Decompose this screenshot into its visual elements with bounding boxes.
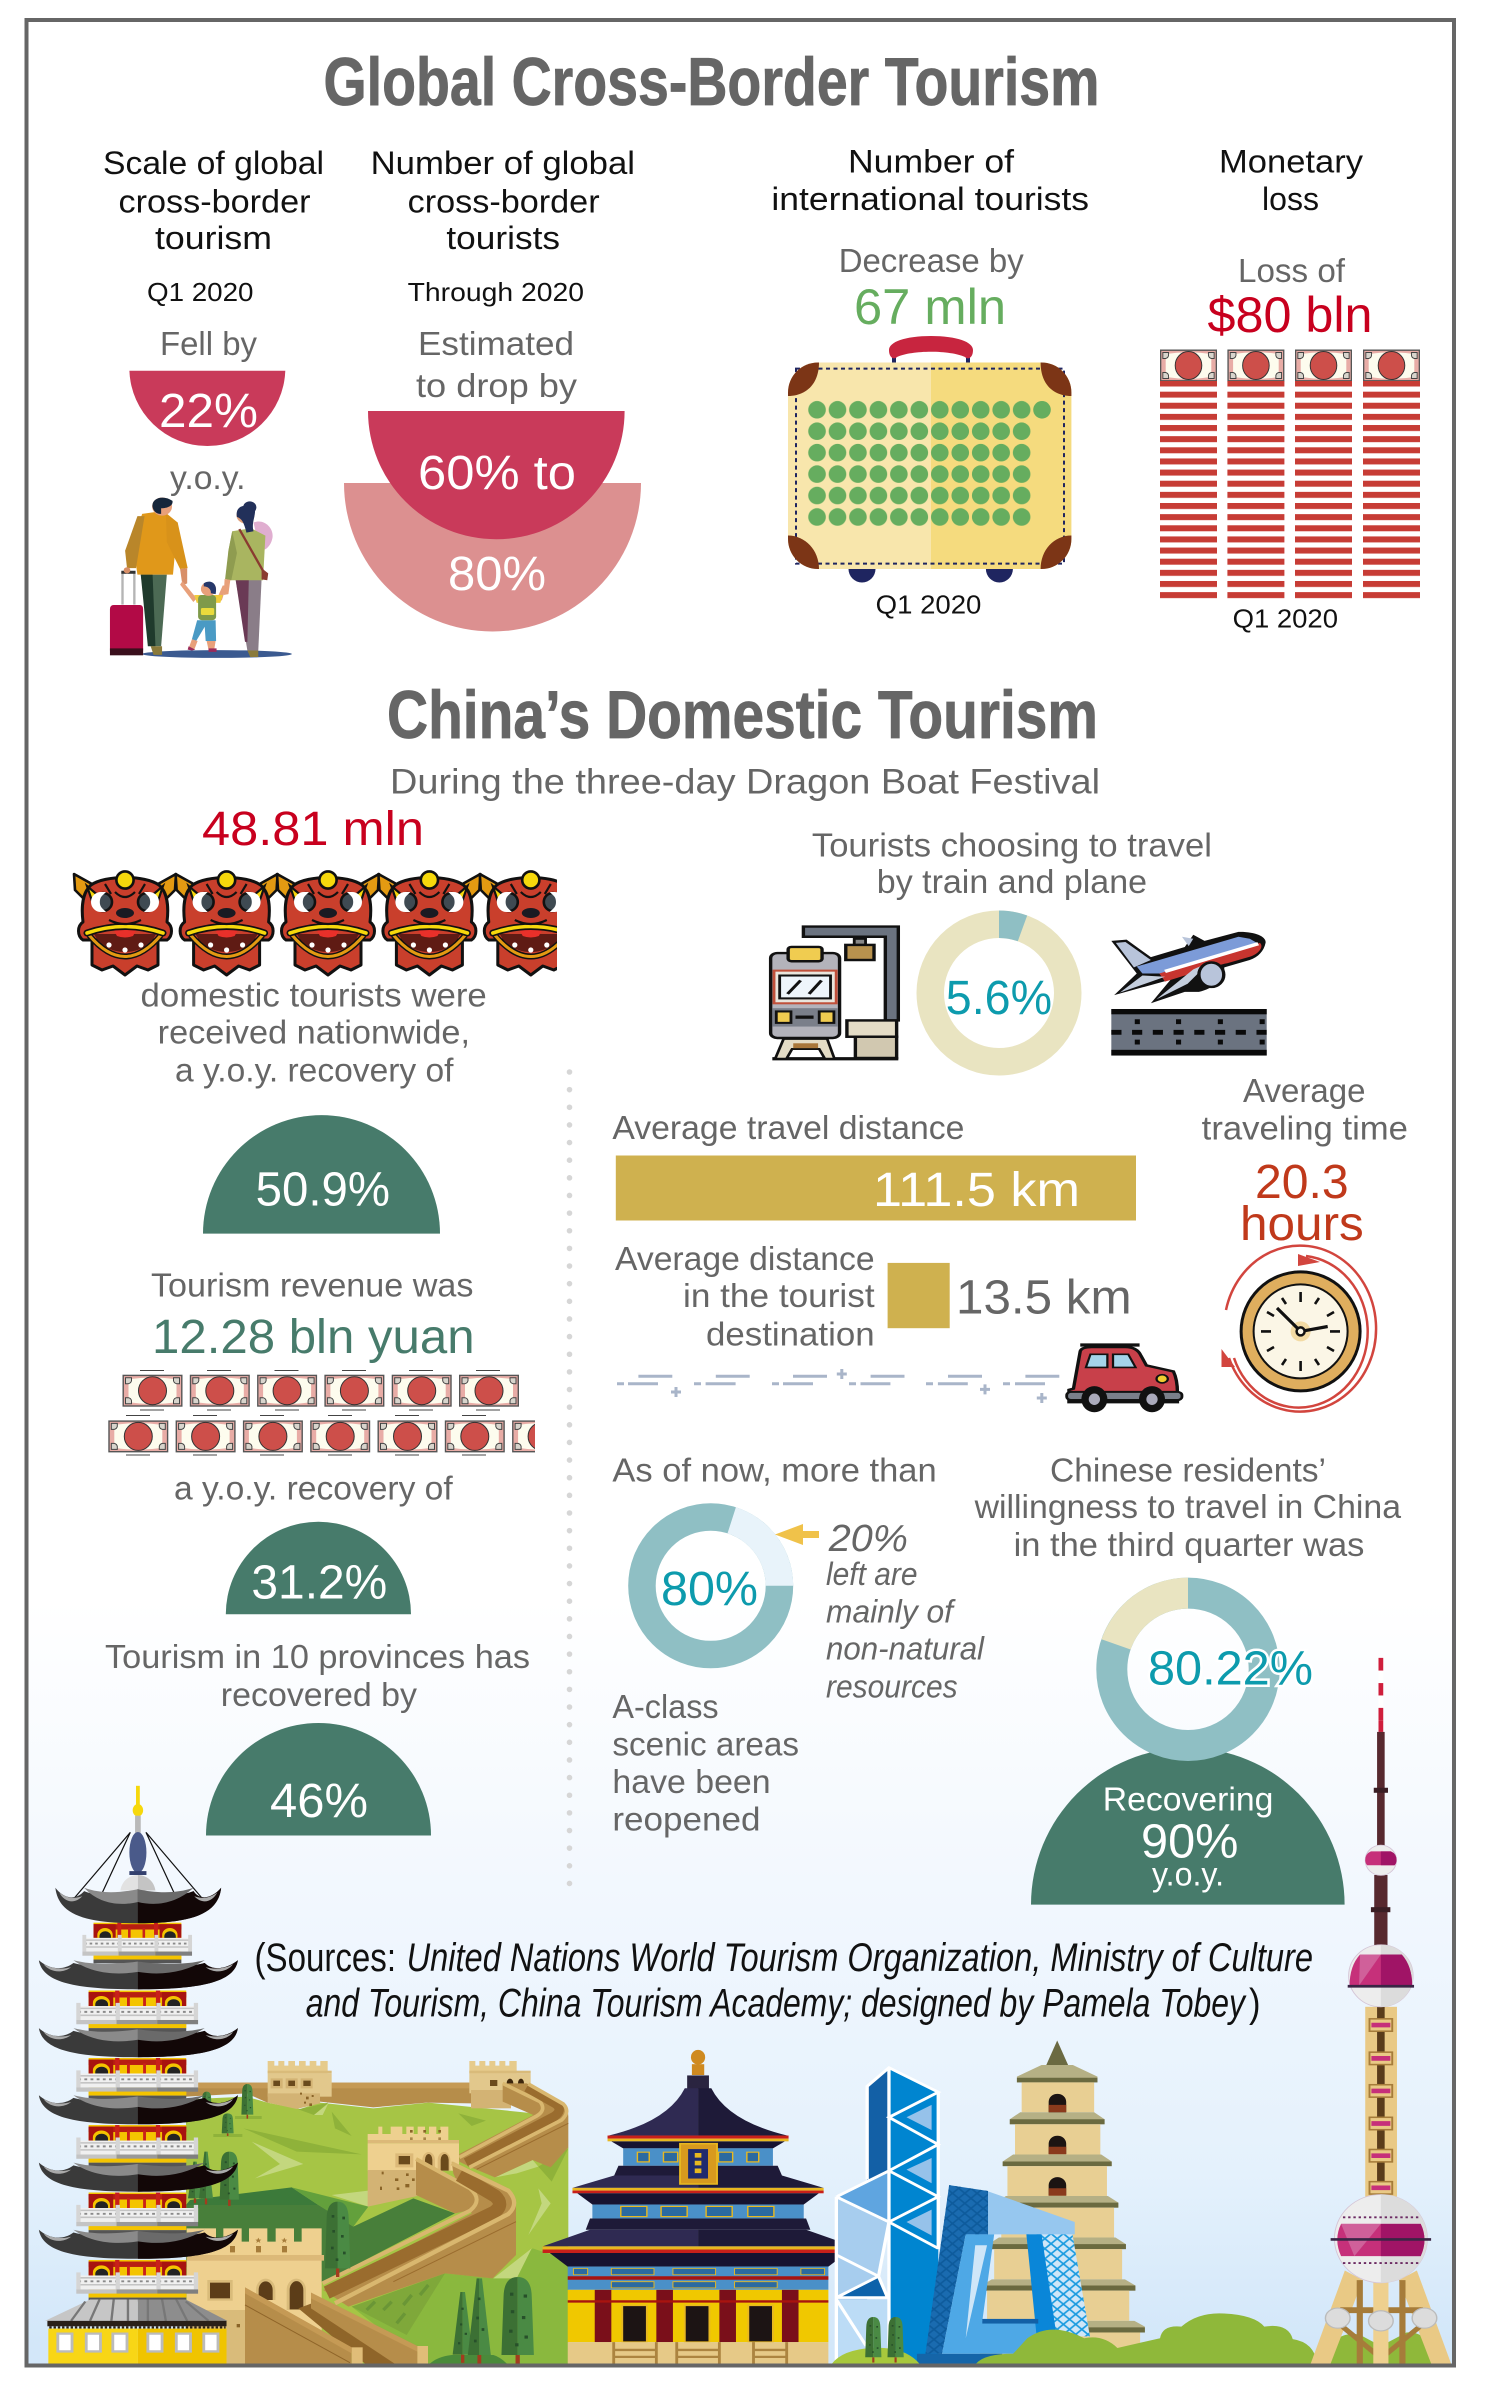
value: 67 mln: 67 mln xyxy=(854,279,1006,335)
callout: 20% left are mainly of non-natural resources: left are xyxy=(826,1556,918,1592)
label: Chinese residents' willingness xyxy=(974,1451,1402,1563)
label: average traveling time: Average xyxy=(1243,1072,1366,1109)
icon: red car xyxy=(1067,1345,1182,1412)
label: tourism in 10 provinces xyxy=(105,1638,530,1713)
panel: tourists by train and plane xyxy=(771,826,1267,1062)
value: 20.3 hours: 20.3 xyxy=(1255,1156,1349,1209)
label: a y.o.y. recovery of: a y.o.y. recovery of xyxy=(174,1470,454,1506)
illustration: Temple of Heaven xyxy=(543,2050,853,2363)
panel: scale of global cross-border tourism xyxy=(103,145,324,658)
label: tourists choosing to travel: by train and plane xyxy=(877,863,1147,900)
label: average distance in the tourist destination xyxy=(615,1240,875,1353)
callout: 20% left are mainly of non-natural resources: mainly of xyxy=(826,1593,956,1629)
heading: number of global tourists: tourists xyxy=(446,220,560,256)
label: y.o.y.: y.o.y. xyxy=(170,459,246,496)
half circle: 22%: 22% xyxy=(159,385,258,438)
half circles: 60% to 80%: 60% to xyxy=(418,447,576,500)
panel: monetary loss xyxy=(1160,144,1420,634)
panel: average traveling time xyxy=(1202,1072,1408,1412)
heading: number of global tourists: cross-border xyxy=(408,184,600,220)
text: domestic tourists received xyxy=(140,976,487,1088)
source note: and Tourism, China Tourism Academy; designed by Pamela Tobey xyxy=(306,1982,1247,2026)
panel: tourism revenue xyxy=(109,1267,571,1614)
label: average distance in the tourist destination: destination xyxy=(706,1316,875,1353)
heading: scale of global tourism: cross-border xyxy=(118,184,311,220)
heading: scale of global tourism: tourism xyxy=(155,220,272,256)
label: average travel distance: Average travel distance xyxy=(612,1109,964,1146)
text: domestic tourists received: received nationwide, xyxy=(158,1014,470,1050)
source note xyxy=(254,1936,1313,2026)
road markings xyxy=(617,1369,1059,1403)
icon rows: banknotes xyxy=(109,1370,571,1455)
panel: willingness to travel xyxy=(974,1451,1402,1905)
icon row: lion dance heads xyxy=(74,871,582,975)
label: estimated to drop by xyxy=(416,325,578,404)
icon: travelling family xyxy=(110,497,292,658)
label: loss of: Loss of xyxy=(1238,252,1346,289)
callout: 20% left are mainly of non-natural resources: 20% xyxy=(828,1518,908,1560)
label: tourists choosing to travel: Tourists choosing to travel xyxy=(812,826,1212,863)
bar: 13.5 km xyxy=(888,1263,1132,1328)
heading: number of international tourists xyxy=(771,144,1089,217)
panel: domestic tourists xyxy=(74,803,582,1234)
label: tourism revenue was: Tourism revenue was xyxy=(151,1267,473,1304)
heading: monetary loss: loss xyxy=(1262,181,1319,217)
label: tourism in 10 provinces: recovered by xyxy=(221,1676,418,1713)
illustration: landmark skyline xyxy=(39,1658,1451,2365)
panel: number of global cross-border tourists xyxy=(344,145,641,632)
subheading: dragon boat festival: During the three-day Dragon Boat Festival xyxy=(390,763,1100,802)
icon: suitcase with dots xyxy=(788,336,1071,582)
bar: 111.5 km: 111.5 km xyxy=(873,1164,1080,1217)
heading: scale of global tourism xyxy=(103,145,324,256)
illustration: pagoda xyxy=(39,1786,238,2363)
value: 20.3 hours: hours xyxy=(1240,1198,1364,1251)
heading: monetary loss: Monetary xyxy=(1219,144,1363,180)
donut chart: 80% xyxy=(642,1507,793,1655)
text: domestic tourists received: domestic tourists were xyxy=(140,976,487,1014)
bar: 13.5 km: 13.5 km xyxy=(956,1272,1132,1324)
half circle: recovering 90% y.o.y.: 90% xyxy=(1141,1816,1238,1869)
half circle: 22% xyxy=(129,371,285,446)
heading: number of global tourists xyxy=(371,145,635,256)
label: tourists choosing to travel xyxy=(812,826,1212,900)
label: A-class scenic areas have been reopened: A-class xyxy=(612,1688,719,1725)
illustration: Bank of China Tower xyxy=(836,2068,938,2363)
period label: through 2020: Through 2020 xyxy=(408,277,584,307)
panel: average travel distance xyxy=(612,1109,1182,1412)
half circle: recovering 90% y.o.y.: Recovering xyxy=(1103,1780,1273,1817)
source note: ) xyxy=(1249,1982,1260,2026)
heading: China's Domestic Tourism: China’s Domestic Tourism xyxy=(387,677,1098,753)
illustration: Great Wall xyxy=(186,2061,568,2365)
panel: number of international tourists xyxy=(771,144,1089,620)
label: A-class scenic areas have been reopened xyxy=(612,1688,799,1838)
illustration: Giant Wild Goose Pagoda xyxy=(975,2041,1145,2363)
icon: train at station xyxy=(771,927,898,1059)
value: 12.28 bln yuan: 12.28 bln yuan xyxy=(152,1311,475,1364)
half circle: recovering 90% y.o.y. xyxy=(1031,1748,1345,1905)
label: estimated to drop by: Estimated xyxy=(418,325,574,362)
value: $80 bln: $80 bln xyxy=(1208,287,1372,343)
title: Global Cross-Border Tourism: Global Cross-Border Tourism xyxy=(324,44,1100,120)
heading: scale of global tourism: Scale of global xyxy=(103,145,324,181)
half circle: 46%: 46% xyxy=(270,1775,368,1828)
heading: number of international tourists: international tourists xyxy=(771,181,1089,217)
panel: A-class scenic areas xyxy=(612,1451,985,1838)
donut chart: 80%: 80% xyxy=(661,1563,758,1616)
panel: tourism in 10 provinces xyxy=(105,1638,530,1836)
label: Chinese residents' willingness: in the third quarter was xyxy=(1014,1526,1364,1563)
period label: Q1 2020: Q1 2020 xyxy=(1233,604,1338,634)
half circle: 46% xyxy=(206,1723,431,1836)
callout: 20% left are mainly of non-natural resources xyxy=(826,1518,985,1705)
donut chart: 80.22% xyxy=(1102,1578,1313,1746)
donut chart: 80.22%: 80.22% xyxy=(1148,1642,1313,1695)
half circle: 50.9%: 50.9% xyxy=(256,1164,390,1217)
donut chart: 5.6% xyxy=(930,910,1068,1062)
heading: monetary loss xyxy=(1219,144,1363,217)
value: 48.81 mln: 48.81 mln xyxy=(202,803,424,856)
label: A-class scenic areas have been reopened: scenic areas xyxy=(612,1725,799,1762)
label: A-class scenic areas have been reopened: have been xyxy=(612,1763,771,1800)
callout: 20% left are mainly of non-natural resources: resources xyxy=(826,1669,958,1705)
icon: stacks of banknotes xyxy=(1160,350,1420,599)
half circles: 60% to 80%: 80% xyxy=(448,548,546,601)
label: average distance in the tourist destination: Average distance xyxy=(615,1240,875,1277)
label: as of now, more than: As of now, more than xyxy=(612,1451,937,1488)
label: tourism in 10 provinces: Tourism in 10 provinces has xyxy=(105,1638,530,1675)
illustration: Oriental Pearl Tower xyxy=(1311,1658,1451,2363)
icon: clock with arrows xyxy=(1222,1246,1376,1412)
half circle: 50.9% xyxy=(203,1115,440,1234)
arrow: pointing to 20% slice xyxy=(775,1524,819,1545)
half circles: 60% to 80% xyxy=(344,411,641,632)
source note: United Nations World Tourism Organization, Ministry of Culture xyxy=(407,1936,1313,1980)
bar: 111.5 km xyxy=(616,1156,1136,1220)
label: average traveling time: traveling time xyxy=(1202,1110,1408,1147)
icon: plane over runway xyxy=(1111,932,1267,1056)
label: estimated to drop by: to drop by xyxy=(416,367,578,404)
label: Chinese residents' willingness: willingness to travel in China xyxy=(974,1488,1402,1525)
illustration: CCTV headquarters xyxy=(917,2185,1090,2363)
label: fell by: Fell by xyxy=(160,325,257,362)
label: average distance in the tourist destination: in the tourist xyxy=(683,1277,875,1314)
label: A-class scenic areas have been reopened: reopened xyxy=(612,1801,760,1838)
text: domestic tourists received: a y.o.y. recovery of xyxy=(175,1052,454,1088)
illustration: trees and bushes xyxy=(832,2313,1317,2363)
donut chart: 5.6%: 5.6% xyxy=(946,972,1052,1025)
label: Chinese residents' willingness: Chinese residents’ xyxy=(1050,1451,1326,1488)
period label: Q1 2020: Q1 2020 xyxy=(876,590,981,620)
half circle: 31.2%: 31.2% xyxy=(251,1557,387,1610)
half circle: recovering 90% y.o.y.: y.o.y. xyxy=(1152,1856,1224,1893)
value: 20.3 hours xyxy=(1240,1156,1364,1251)
label: average traveling time xyxy=(1202,1072,1408,1147)
callout: 20% left are mainly of non-natural resources: non-natural xyxy=(826,1630,985,1666)
label: decrease by: Decrease by xyxy=(839,242,1024,279)
half circle: 31.2% xyxy=(226,1522,411,1614)
source note: (Sources: xyxy=(254,1936,396,1980)
heading: number of global tourists: Number of global xyxy=(371,145,635,181)
heading: number of international tourists: Number of xyxy=(848,144,1014,180)
period label: Q1 2020: Q1 2020 xyxy=(147,277,254,307)
